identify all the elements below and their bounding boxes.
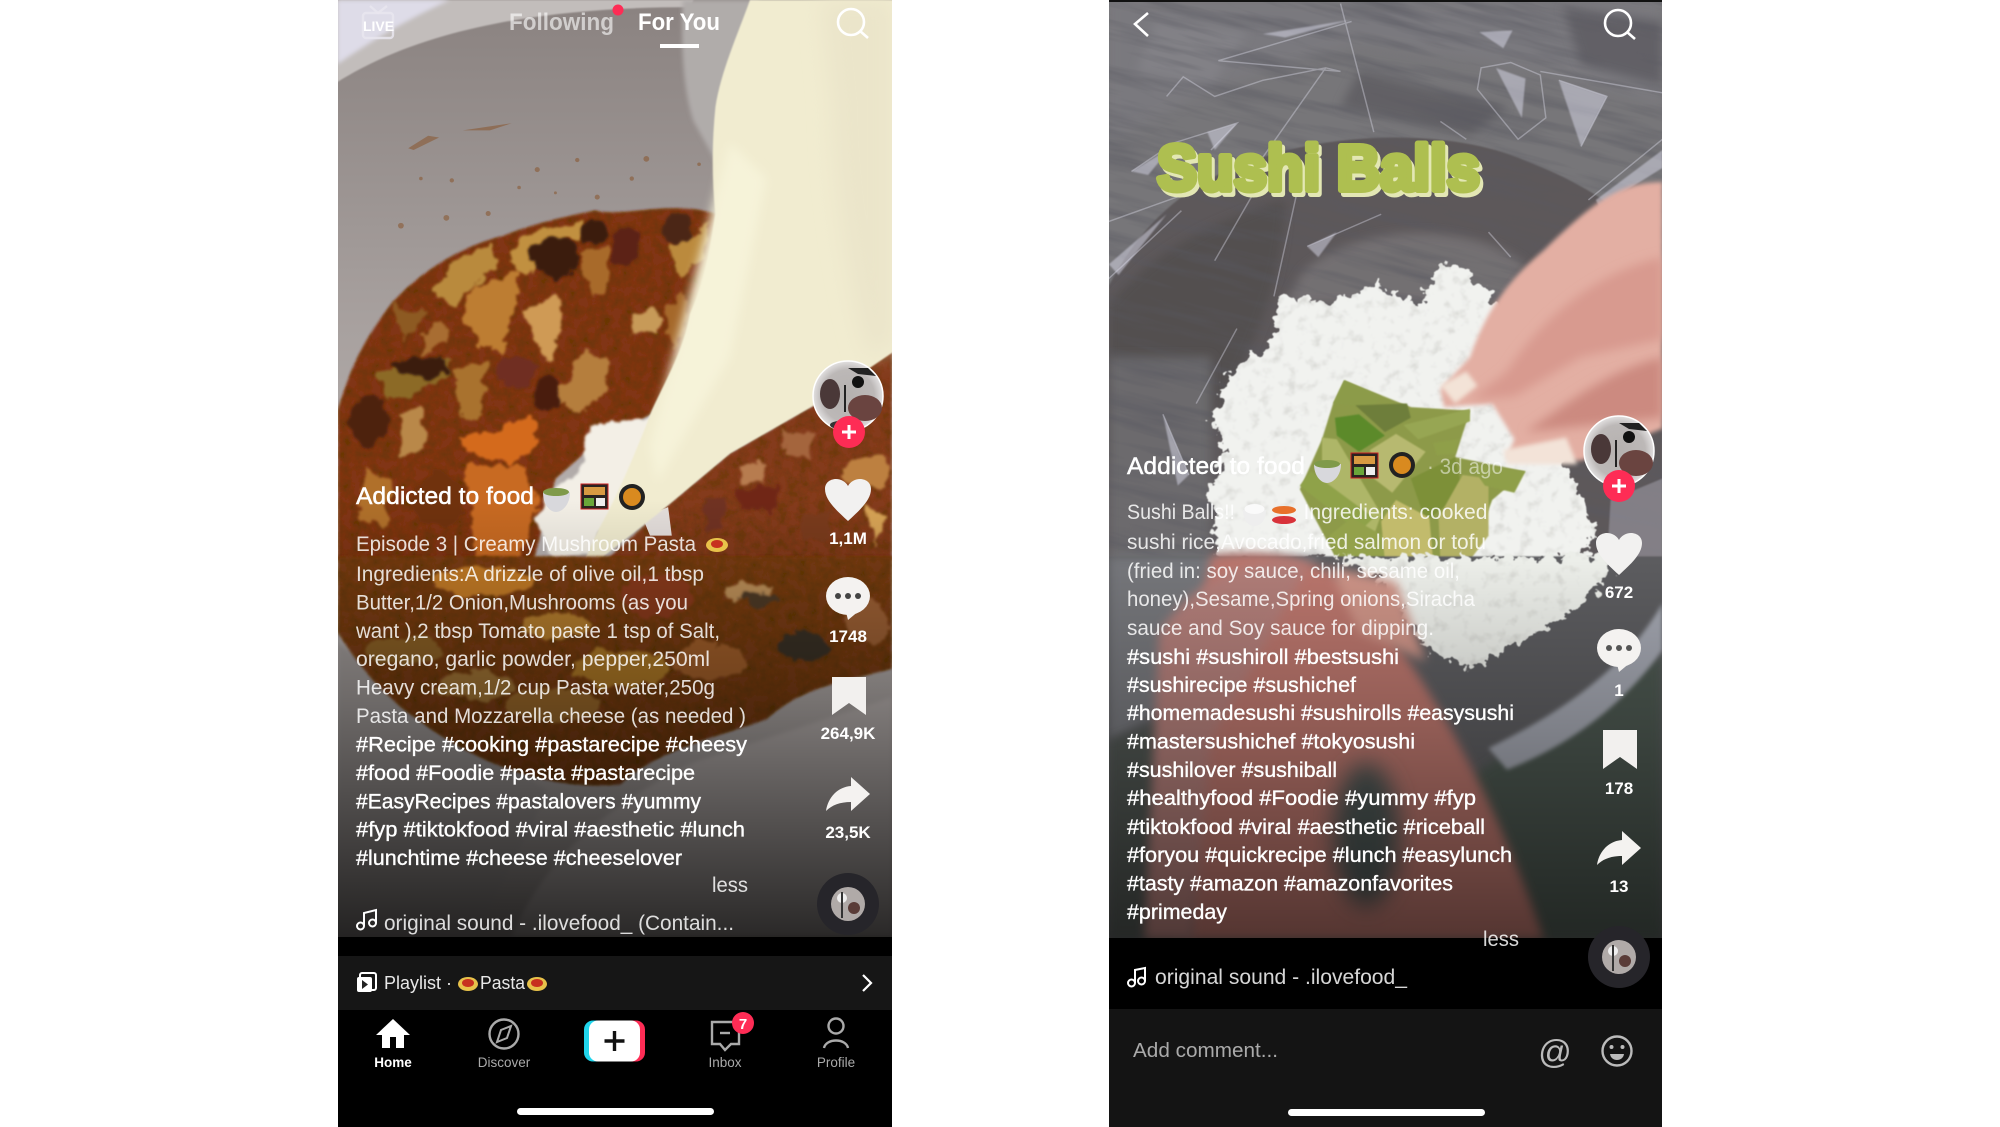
top navigation: [363, 4, 868, 48]
action rail: [1584, 416, 1654, 988]
caption text: #food #Foodie #pasta #pastarecipe: [356, 761, 695, 785]
icon: back chevron: [1135, 13, 1148, 36]
white splash: [534, 418, 657, 560]
share count: 13: [1610, 877, 1628, 896]
caption text: #mastersushichef #tokyosushi: [1127, 730, 1415, 754]
hand: [1440, 182, 1662, 461]
caption text: honey),Sesame,Spring onions,Siracha: [1127, 587, 1475, 611]
mushroom pieces: [359, 221, 708, 560]
sauce mass: [338, 209, 715, 560]
emoji: spaghetti: [706, 538, 728, 552]
caption text: less: [1483, 927, 1519, 951]
icon: LIVE tv: [363, 6, 394, 38]
panel: right phone screenshot (sushi): [1109, 0, 1662, 1127]
caption text: #Recipe #cooking #pastarecipe #cheesy: [356, 732, 747, 756]
photo: cream poured over mushroom sauce: [337, 0, 894, 938]
active tab underline: [660, 44, 699, 48]
caption text: #sushi #sushiroll #bestsushi: [1127, 645, 1399, 669]
caption text: Ingredients:A drizzle of olive oil,1 tbsp: [356, 562, 704, 586]
creator avatar: [1584, 416, 1654, 486]
sound line: original sound - .ilovefood_ (Contain...: [384, 911, 734, 935]
caption text: #EasyRecipes #pastalovers #yummy: [356, 790, 701, 814]
icon: playlist: [357, 973, 376, 992]
tab: Profile: Profile: [817, 1055, 855, 1070]
create button: [584, 1020, 645, 1062]
home indicator: [517, 1108, 714, 1115]
cream stream: [585, 0, 894, 560]
tab: Home: Home: [374, 1055, 412, 1070]
tab: Following: Following: [509, 9, 614, 36]
icon: share: [826, 777, 870, 811]
tab: Profile: [817, 1018, 855, 1070]
comment count: 1: [1614, 681, 1624, 700]
rice continuation: [1337, 556, 1618, 669]
tab: Discover: Discover: [478, 1055, 531, 1070]
caption text: Butter,1/2 Onion,Mushrooms (as you: [356, 590, 688, 614]
emoji: spaghetti: [458, 977, 478, 991]
creator name: Addicted to food: [356, 483, 534, 510]
bottom shade: [1109, 560, 1662, 940]
playlist bar: [357, 972, 871, 993]
lower sauce: [338, 556, 892, 785]
tab: Discover: [478, 1020, 531, 1070]
follow plus: [833, 416, 865, 448]
tab: Home: [374, 1019, 412, 1070]
icon: comment: [826, 577, 870, 620]
caption text: #foryou #quickrecipe #lunch #easylunch: [1127, 843, 1512, 867]
icon: bookmark: [1603, 730, 1637, 769]
playlist bar: Pasta: [480, 972, 526, 993]
icon: search: [838, 9, 868, 38]
icon: heart: [825, 479, 871, 521]
creator name: [1127, 452, 1503, 483]
panel: left phone screenshot (pasta): [337, 0, 894, 1127]
comment input: [1133, 1033, 1632, 1070]
emoji: noodle bowl: [543, 488, 570, 512]
rice: [1211, 264, 1596, 560]
dark plate: [1109, 137, 1662, 560]
creator name: Addicted to food: [1127, 453, 1305, 480]
playlist bar background: [338, 956, 892, 1010]
concrete shading: [1109, 0, 1662, 143]
post age: · 3d ago: [1427, 454, 1503, 479]
icon: heart: [1596, 533, 1642, 575]
caption text: [355, 532, 748, 897]
concrete streak texture: [1109, 2, 1662, 508]
creator name: [356, 483, 645, 512]
blurred fingers: [1188, 554, 1544, 940]
icon: chevron: [863, 975, 871, 991]
icon: bookmark: [832, 677, 866, 715]
plastic wrap highlights: [1109, 4, 1662, 475]
emoji: noodle bowl: [1314, 460, 1341, 483]
bookmark count: 264,9K: [821, 724, 876, 743]
caption text: #primeday: [1127, 900, 1227, 924]
caption text: #healthyfood #Foodie #yummy #fyp: [1127, 786, 1476, 810]
emoji: paella pan: [1389, 452, 1415, 478]
music disc: [1588, 926, 1650, 988]
caption text: #sushilover #sushiball: [1127, 758, 1337, 782]
bookmark count: 178: [1605, 779, 1633, 798]
caption text: less: [712, 873, 748, 897]
caption text: Sushi Balls!!: [1127, 500, 1235, 524]
video title: Sushi Balls: Sushi Balls: [1157, 132, 1480, 204]
lower right sauce: [606, 350, 892, 560]
music disc: [817, 873, 879, 935]
caption text: #lunchtime #cheese #cheeselover: [356, 846, 682, 870]
inbox badge: [732, 1012, 754, 1034]
caption text: #tasty #amazon #amazonfavorites: [1127, 872, 1453, 896]
bottom tab bar: [374, 1012, 855, 1070]
emoji: bento: [1351, 453, 1378, 478]
caption text: Ingredients: cooked: [1304, 500, 1488, 524]
emoji: spaghetti: [527, 977, 547, 991]
like count: 672: [1605, 583, 1633, 602]
notification dot: [612, 4, 624, 16]
icon: share: [1597, 831, 1641, 865]
caption text: #sushirecipe #sushichef: [1127, 673, 1356, 697]
icon: comment: [1597, 629, 1641, 672]
caption text: #homemadesushi #sushirolls #easysushi: [1127, 701, 1514, 725]
caption text: Heavy cream,1/2 cup Pasta water,250g: [356, 676, 715, 700]
emoji: paella pan: [619, 484, 645, 510]
speckles: [398, 123, 701, 229]
lower grey: [1109, 555, 1662, 786]
photo: rice and avocado on plate: [1109, 2, 1662, 938]
caption text: (fried in: soy sauce, chili, sesame oil,: [1127, 559, 1460, 583]
tab: For You: For You: [638, 9, 720, 36]
icon: music note: [1128, 968, 1145, 986]
emoji: bento: [581, 484, 608, 509]
home indicator: [1288, 1109, 1485, 1116]
comment count: 1748: [829, 627, 867, 646]
caption text: Pasta and Mozzarella cheese (as needed ): [356, 704, 746, 728]
avocado base: [1300, 380, 1526, 560]
inbox badge: 7: [739, 1016, 747, 1033]
share count: 23,5K: [825, 823, 871, 842]
action rail: [813, 361, 883, 935]
icon: music note: [357, 910, 376, 930]
caption text: sushi rice,Avocado,fried salmon or tofu: [1127, 530, 1486, 554]
pan below the sauce: [556, 702, 890, 874]
icon: search: [1605, 10, 1635, 39]
bottom bars: [1109, 0, 1662, 1127]
emoji: rice bowl: [1243, 504, 1266, 526]
follow plus: [1603, 470, 1635, 502]
caption text: oregano, garlic powder, pepper,250ml: [356, 647, 710, 671]
pan rim: [337, 0, 694, 82]
emoji: sushi: [1272, 506, 1296, 524]
video title: Sushi Balls: Sushi Balls: [1160, 136, 1483, 208]
tab: Inbox: [708, 1022, 742, 1070]
caption text: #tiktokfood #viral #aesthetic #riceball: [1127, 815, 1485, 839]
caption text: Episode 3 | Creamy Mushroom Pasta: [356, 532, 696, 556]
caption text: sauce and Soy sauce for dipping.: [1127, 616, 1434, 640]
caption text: want ),2 tbsp Tomato paste 1 tsp of Salt,: [355, 619, 720, 643]
sound line: original sound - .ilovefood_: [1155, 965, 1408, 989]
tab: Inbox: Inbox: [708, 1055, 742, 1070]
comment input: Add comment...: [1133, 1039, 1278, 1062]
like count: 1,1M: [829, 529, 867, 548]
icon: at sign: @: [1538, 1033, 1572, 1070]
bottom bars: [338, 937, 892, 1127]
caption text: #fyp #tiktokfood #viral #aesthetic #lunch: [356, 818, 745, 842]
avocado: [1300, 380, 1526, 560]
icon: smiley: [1602, 1036, 1632, 1066]
icon: LIVE tv: LIVE: [363, 18, 394, 34]
caption text: [1127, 500, 1519, 951]
playlist bar: Playlist ·: [384, 972, 452, 993]
creator avatar: [813, 361, 883, 431]
